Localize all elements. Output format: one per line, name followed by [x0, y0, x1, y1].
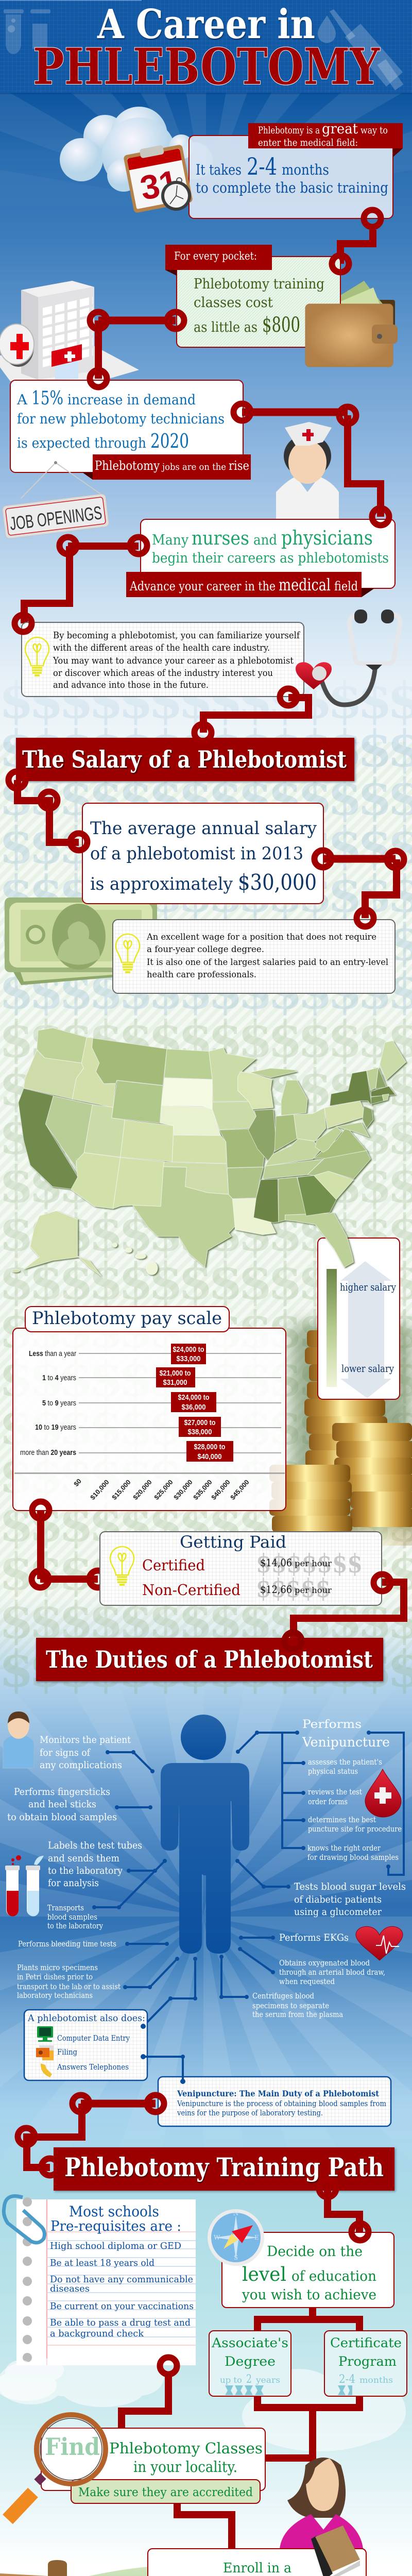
ribbon: enter the medical field: — [258, 137, 358, 148]
panel: getting paid: $$$$$$$ — [256, 1548, 363, 1579]
panel: decide level of education: Decide on the — [267, 2244, 363, 2260]
header band — [0, 0, 412, 94]
panel: basic training duration: It takes — [196, 161, 242, 178]
panel: map legend: higher salary — [340, 1281, 397, 1293]
connector — [70, 834, 404, 918]
icon: signpost — [0, 2560, 123, 2576]
ribbon — [165, 245, 272, 270]
ribbon: way to — [360, 125, 388, 136]
connector — [14, 615, 308, 733]
panel: a phlebotomist also does: Computer Data Entry — [57, 2033, 130, 2043]
ribbon — [126, 572, 362, 597]
connector — [24, 508, 389, 623]
icon: monitor — [37, 2026, 53, 2042]
icon: clouds — [0, 2358, 406, 2451]
text: right duties: through an arterial blood draw, — [279, 1969, 385, 1977]
panel: associate's degree — [209, 2331, 291, 2396]
heading: duties — [36, 1632, 383, 1681]
text: left duties: any complications — [40, 1759, 122, 1771]
panel: excellent wage: health care professionals. — [147, 970, 256, 980]
title tab: Phlebotomy pay scale — [32, 1308, 222, 1329]
text: left duties: laboratory technicians — [17, 1992, 93, 2000]
panel: find classes: Find — [45, 2433, 100, 2461]
panel: getting paid: $12,66 — [260, 1583, 292, 1596]
ribbon: field — [334, 579, 358, 594]
text: right duties: determines the best — [308, 1816, 376, 1824]
panel: certificate program: Certificate — [330, 2335, 402, 2350]
panel: prerequisites notepaper: Be able to pass a drug test and — [50, 2317, 191, 2328]
connector — [90, 312, 184, 379]
icon: compass — [208, 2209, 264, 2266]
icon: light bulb — [25, 637, 49, 675]
panel: certificate program: 2-4 — [339, 2373, 355, 2386]
x axis labels: $0 — [72, 1477, 83, 1488]
icon: compass: S — [234, 2254, 238, 2261]
heading: salary: The Salary of a Phlebotomist — [22, 745, 347, 773]
icon: gold coin stacks — [269, 1324, 412, 1546]
panel: decide level of education: you wish to achieve — [242, 2287, 376, 2303]
icon: heart with EKG line — [356, 1926, 403, 1960]
panel: training cost: as little as — [194, 319, 258, 335]
icon: test tubes — [4, 9, 50, 54]
icon: banknotes — [5, 897, 157, 985]
icon: stethoscope — [296, 609, 400, 705]
text: left duties: blood samples — [47, 1913, 97, 1922]
panel: certificate program: Program — [338, 2354, 397, 2369]
panel: excellent wage — [113, 920, 395, 993]
title: A Career in — [97, 1, 315, 48]
panel: nurses and physicians — [126, 519, 395, 597]
panel: getting paid: $14,06 — [260, 1556, 292, 1569]
salary ranges: $27,000 to — [184, 1418, 215, 1427]
text: right duties: puncture site for procedure — [308, 1825, 402, 1834]
icon: red cross circle — [0, 324, 34, 367]
text: right duties: assesses the patient's — [308, 1758, 382, 1767]
panel: demand increase: 15% — [31, 388, 63, 409]
panel: find classes: in your locality. — [133, 2458, 237, 2476]
ribbon: great — [322, 121, 358, 137]
panel: map legend — [318, 1238, 400, 1399]
panel: getting paid — [100, 1532, 382, 1605]
panel: average salary: is approximately — [90, 874, 233, 894]
text: right duties: physical status — [308, 1768, 358, 1776]
salary ranges: $24,000 to — [173, 1345, 204, 1354]
text: right duties: using a glucometer — [294, 1906, 382, 1918]
panel: find classes — [41, 2428, 265, 2490]
text: right duties: reviews the test — [308, 1788, 362, 1797]
panel: excellent wage: An excellent wage for a position that does not require — [146, 932, 376, 942]
panel: nurses and physicians: Many — [152, 532, 189, 548]
panel: associate's degree: Degree — [225, 2354, 276, 2369]
panel: average salary: The average annual salary — [90, 818, 317, 839]
panel: training cost: $800 — [262, 313, 300, 337]
text: left duties: Plants micro specimens — [17, 1964, 98, 1972]
panel: demand increase: A — [16, 392, 28, 408]
x axis labels — [72, 1477, 251, 1501]
icon: light bulb — [110, 1547, 134, 1585]
connector — [319, 2180, 359, 2232]
panel: prerequisites notepaper: diseases — [50, 2283, 90, 2294]
panel: decide level of education: of education — [291, 2268, 376, 2284]
text: right duties: specimens to separate — [252, 2002, 329, 2010]
salary ranges: $24,000 to — [178, 1393, 209, 1402]
icon: wallet back — [307, 281, 395, 331]
panel: find classes: Phlebotomy Classes — [109, 2439, 263, 2457]
icon: blood drop — [365, 1769, 401, 1817]
salary ranges: $28,000 to — [194, 1443, 226, 1451]
panel: associate's degree: up to — [220, 2375, 242, 2385]
icon: woman with book — [280, 2458, 363, 2549]
salary ranges: $36,000 — [181, 1403, 206, 1412]
text: right duties — [252, 1718, 406, 2019]
text: right duties: Obtains oxygenated blood — [279, 1959, 370, 1968]
panel: pay scale — [13, 1307, 286, 1511]
panel: associate's degree: years — [255, 2375, 280, 2385]
panel: a phlebotomist also does: Filing — [57, 2047, 77, 2057]
ribbon: For every pocket: — [174, 250, 257, 262]
panel: excellent wage: a four-year college degree. — [147, 944, 264, 955]
x axis labels: $45,000 — [229, 1478, 251, 1501]
ribbon — [248, 121, 403, 148]
icon: hourglasses — [338, 2385, 352, 2395]
map: salary by state — [12, 1028, 406, 1276]
text: right duties: the serum from the plasma — [252, 2011, 343, 2019]
panel: getting paid: Certified — [142, 1556, 205, 1574]
x axis labels: $35,000 — [192, 1478, 214, 1501]
ribbon: jobs are on the — [161, 462, 226, 472]
panel: basic training duration: months — [282, 161, 329, 178]
icon: nurse — [276, 422, 339, 519]
bar labels: 5 to 9 years — [42, 1399, 76, 1408]
text: right duties: knows the right order — [307, 1844, 381, 1853]
text: right duties: for drawing blood samples — [307, 1854, 399, 1862]
bar labels: Less than a year — [29, 1349, 76, 1358]
text: left duties: for analysis — [48, 1877, 99, 1889]
text: left duties: to obtain blood samples — [7, 1811, 117, 1823]
heading: training path — [54, 2147, 394, 2191]
icon: paperclip — [4, 2196, 44, 2243]
x axis labels: $10,000 — [89, 1478, 111, 1501]
panel: prerequisites notepaper: Be at least 18 years old — [50, 2258, 154, 2268]
icon: compass: E — [254, 2234, 259, 2241]
salary ranges: $31,000 — [163, 1378, 187, 1387]
connector — [294, 1574, 404, 1641]
panel: advance your career: By becoming a phlebotomist, you can familiarize yourself — [53, 630, 300, 641]
x axis labels: $15,000 — [110, 1478, 132, 1501]
panel: training cost — [165, 245, 340, 347]
text: right duties: Performs EKGs — [279, 1932, 349, 1943]
bar labels: 10 to 19 years — [35, 1423, 76, 1432]
panel: associate's degree: 2 — [246, 2373, 252, 2386]
panel: nurses and physicians: nurses — [192, 528, 249, 549]
text: left duties: Labels the test tubes — [48, 1840, 142, 1851]
text: right duties: order forms — [308, 1798, 348, 1806]
connector — [90, 370, 381, 517]
panel: excellent wage: It is also one of the largest salaries paid to an entry-level — [147, 957, 388, 968]
panel: advance your career: with the different areas of the health care industry. — [53, 642, 270, 653]
icon: light bulb — [116, 934, 140, 972]
diagram lines — [92, 1731, 404, 2026]
panel: getting paid: per hour — [295, 1558, 332, 1568]
panel: enroll: Enroll in a — [223, 2561, 291, 2576]
panel: prerequisites notepaper: Most schools — [69, 2203, 159, 2220]
bar labels — [20, 1349, 76, 1457]
bar labels: more than 20 years — [20, 1448, 76, 1457]
x axis labels: $20,000 — [131, 1478, 153, 1501]
text: left duties: transport to the lab or to assist — [17, 1983, 121, 1991]
icon: magnifying glass — [8, 2415, 106, 2519]
panel: demand increase: increase in demand — [67, 392, 196, 408]
icon: hourglasses — [225, 2385, 264, 2395]
panel: prerequisites notepaper: High school diploma or GED — [50, 2241, 181, 2251]
panel: a phlebotomist also does: A phlebotomist also does: — [27, 2013, 145, 2024]
connector: education branches — [258, 2224, 369, 2458]
text: right duties: Performs — [302, 1718, 362, 1731]
ribbon — [93, 454, 251, 480]
panel: demand increase: is expected through — [17, 435, 146, 451]
panel: getting paid: Non-Certified — [142, 1581, 241, 1599]
icon: calendar and stopwatch — [123, 141, 193, 213]
panel: getting paid: $$$$$ — [256, 1573, 331, 1603]
salary ranges: $38,000 — [187, 1428, 212, 1436]
x axis labels: $30,000 — [172, 1478, 194, 1501]
icon: wallet — [305, 304, 398, 367]
panel: demand increase: for new phlebotomy technicians — [17, 411, 225, 427]
panel: nurses and physicians: begin their careers as phlebotomists — [152, 550, 389, 566]
panel: decide level of education — [222, 2232, 394, 2308]
panel: enroll — [148, 2549, 366, 2576]
panel: certificate program — [324, 2331, 407, 2396]
panel: advance your career: and advance into those in the future. — [53, 680, 209, 690]
panel: nurses and physicians: physicians — [281, 527, 373, 549]
salary ranges: $21,000 to — [160, 1369, 191, 1378]
figure: person silhouette — [161, 1715, 249, 1954]
icon: hospital — [0, 281, 139, 381]
text: left duties: and heel sticks — [28, 1799, 96, 1810]
panel: training cost: Phlebotomy training — [194, 276, 324, 292]
title — [33, 1, 380, 96]
panel: demand increase — [10, 380, 251, 480]
icon: test tubes — [5, 1855, 44, 1917]
text: left duties: to the laboratory — [47, 1922, 104, 1930]
connector — [8, 724, 211, 842]
panel: map legend: lower salary — [341, 1362, 394, 1375]
text: right duties: when requested — [279, 1978, 335, 1986]
panel: venipuncture definition: veins for the purpose of laboratory testing. — [177, 2108, 323, 2117]
connector — [356, 910, 374, 926]
text: left duties: in Petri dishes prior to — [17, 1973, 93, 1981]
salary ranges: $40,000 — [198, 1452, 221, 1461]
text: right duties: Centrifuges blood — [252, 1992, 314, 2001]
icon: hanging job openings sign: JOB OPENINGS — [9, 502, 103, 534]
panel: average salary — [82, 803, 323, 904]
icon: book — [311, 2526, 360, 2576]
icon: telephone — [41, 2063, 52, 2077]
text: left duties: Performs bleeding time tests — [18, 1940, 116, 1948]
panel: prerequisites notepaper: Be current on your vaccinations — [50, 2301, 194, 2312]
panel: advance your career: You may want to advance your career as a phlebotomist — [53, 655, 294, 666]
panel: a phlebotomist also does — [24, 2010, 147, 2080]
text: left duties: and sends them — [48, 1853, 119, 1864]
hills — [0, 2567, 412, 2576]
text: left duties: Performs fingersticks — [14, 1786, 110, 1798]
panel: advance your career: or discover which areas of the industry interest you — [53, 668, 273, 679]
callout: accredited: Make sure they are accredited — [78, 2486, 253, 2499]
connector — [122, 2358, 177, 2428]
connector — [177, 2503, 232, 2549]
panel: average salary: $30,000 — [238, 870, 317, 895]
connector — [340, 210, 381, 264]
text: right duties: Venipuncture — [302, 1735, 390, 1750]
panel: a phlebotomist also does: Answers Telephones — [57, 2062, 129, 2072]
panel: prerequisites notepaper: Do not have any communicable — [50, 2274, 193, 2285]
ribbon: rise — [229, 459, 249, 473]
ribbon: Phlebotomy is a — [258, 125, 320, 136]
text: left duties — [7, 1734, 142, 2000]
panel: nurses and physicians: and — [253, 532, 277, 548]
x axis labels: $40,000 — [210, 1478, 232, 1501]
text: left duties: Monitors the patient — [40, 1734, 131, 1745]
connector — [32, 1501, 106, 1588]
salary ranges — [156, 1344, 233, 1462]
panel: venipuncture definition: Venipuncture is the process of obtaining blood samples from — [177, 2099, 386, 2108]
icon: compass: N — [233, 2210, 238, 2217]
panel: prerequisites notepaper: a background check — [50, 2328, 144, 2339]
panel: getting paid: per hour — [295, 1585, 332, 1595]
panel: venipuncture definition — [158, 2077, 391, 2126]
text: left duties: for signs of — [40, 1747, 91, 1758]
panel: certificate program: months — [359, 2375, 393, 2385]
salary ranges: $33,000 — [176, 1354, 201, 1363]
bar labels: 1 to 4 years — [42, 1374, 76, 1382]
connector — [18, 2095, 164, 2175]
icon: cloud over paper — [0, 2359, 64, 2401]
ribbon: Phlebotomy — [95, 459, 160, 473]
panel: average salary: of a phlebotomist in 2013 — [90, 843, 303, 864]
panel: prerequisites notepaper: Pre-requisites are : — [50, 2218, 181, 2234]
panel: basic training duration: 2-4 — [247, 152, 277, 180]
connector — [332, 256, 349, 272]
panel: basic training duration — [189, 121, 403, 218]
ribbon: Advance your career in the — [129, 579, 276, 594]
panel: venipuncture definition: Venipuncture: The Main Duty of a Phlebotomist — [177, 2089, 380, 2098]
panel: getting paid: Getting Paid — [180, 1532, 286, 1552]
panel: advance your career — [22, 622, 304, 697]
icon: compass: W — [214, 2234, 220, 2241]
text: left duties: Transports — [47, 1904, 84, 1912]
icon: phlebotomist figure — [3, 1711, 34, 1768]
icon: hanging job openings sign — [2, 461, 109, 539]
panel: prerequisites notepaper — [4, 2196, 196, 2365]
ribbon: medical — [279, 575, 331, 595]
x axis labels: $25,000 — [152, 1478, 175, 1501]
panel: decide level of education: level — [242, 2263, 286, 2285]
icon: cloud — [60, 107, 213, 192]
panel: basic training duration: to complete the basic training — [196, 179, 388, 196]
callout: accredited — [71, 2480, 260, 2503]
heading: salary — [16, 738, 354, 781]
icon: id card file — [36, 2045, 54, 2060]
connector: also does to venipuncture — [141, 2024, 185, 2084]
panel: demand increase: 2020 — [150, 430, 189, 452]
icon: syringe and drop — [318, 9, 403, 90]
panel: associate's degree: Associate's — [211, 2335, 288, 2350]
text: right duties: of diabetic patients — [294, 1894, 382, 1905]
icon: calendar and stopwatch: 31 — [137, 162, 181, 207]
text: right duties: Tests blood sugar levels — [294, 1881, 406, 1892]
text: left duties: to the laboratory — [48, 1865, 123, 1876]
panel: training cost: classes cost — [194, 295, 273, 311]
